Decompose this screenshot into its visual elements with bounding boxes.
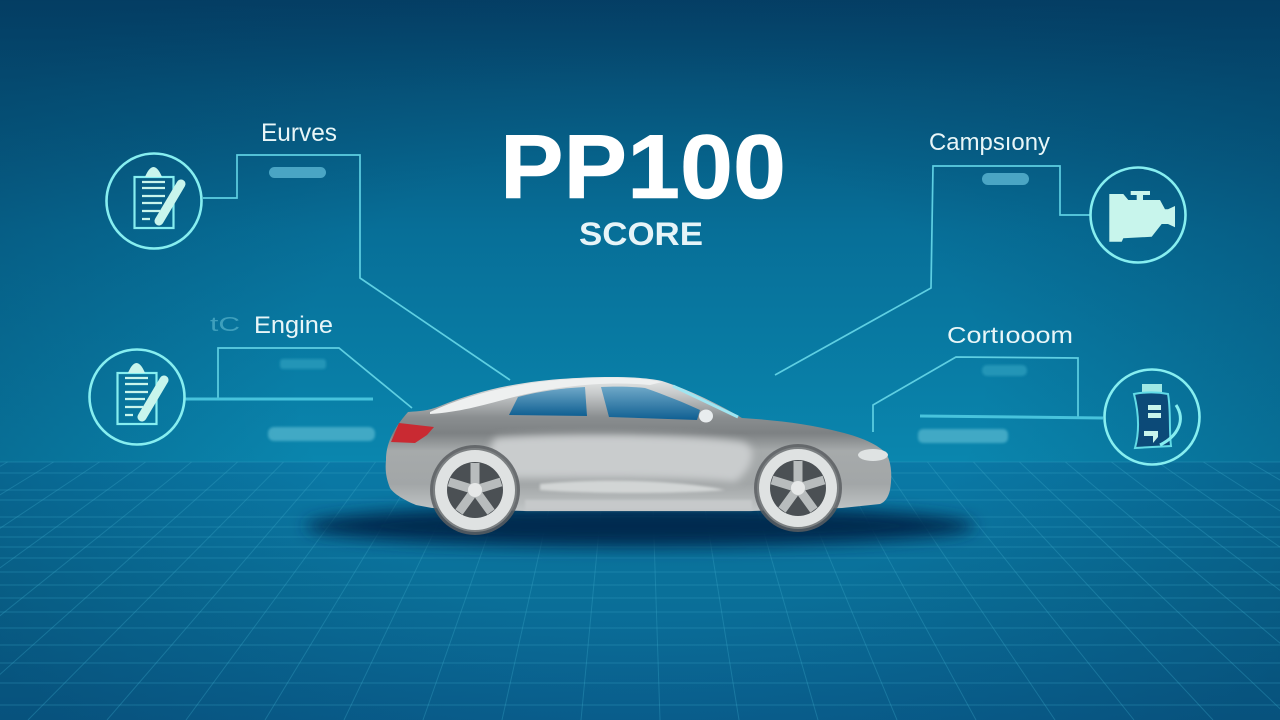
connector line: Eurves to car — [203, 155, 510, 380]
title: PP100: PP100 — [500, 117, 786, 218]
icon: engine — [1090, 168, 1186, 262]
perspective grid floor — [0, 462, 1280, 720]
front window — [601, 387, 700, 420]
lower crease — [540, 481, 725, 493]
placeholder bar — [918, 429, 1008, 443]
callout: Engine (lower left) — [90, 312, 412, 444]
car ground shadow — [305, 505, 975, 547]
callout: Campsiony (top right) — [775, 129, 1186, 375]
label: Eurves: Eurves — [261, 119, 337, 147]
headlight — [858, 449, 888, 461]
thick baseline bar — [185, 398, 373, 400]
tail light — [391, 423, 434, 443]
sill highlight — [525, 500, 752, 510]
rear window — [509, 387, 587, 416]
connector line: Campsiony to car — [775, 166, 1090, 375]
placeholder bar — [982, 173, 1029, 185]
front wheel — [754, 444, 842, 532]
faint glyph beside Engine label: tC — [210, 314, 240, 336]
placeholder bar — [280, 359, 326, 369]
connector line: Engine to car — [218, 348, 412, 408]
label: Engine: Engine — [254, 312, 333, 339]
label: Cortiooom: Cortıooom — [947, 322, 1073, 348]
placeholder bar — [982, 365, 1027, 376]
rear wheel — [430, 445, 520, 535]
thick baseline bar — [920, 416, 1103, 418]
car — [386, 377, 891, 535]
subtitle: SCORE: SCORE — [579, 216, 703, 252]
icon: clipboard and pen — [90, 350, 184, 444]
label: Campsiony: Campsıony — [929, 129, 1050, 156]
callout: Eurves (top left) — [106, 119, 510, 380]
callout: Cortiooom (lower right) — [873, 322, 1200, 464]
windshield edge — [673, 386, 738, 417]
side mirror — [699, 410, 713, 422]
placeholder bar — [269, 167, 326, 178]
icon: oil bottle — [1104, 370, 1200, 464]
icon: clipboard and pen — [106, 154, 202, 248]
connector line: Cortiooom to car — [873, 357, 1078, 432]
placeholder bar — [268, 427, 375, 441]
roof highlight — [430, 378, 662, 414]
car body — [386, 377, 891, 511]
door highlight — [490, 435, 752, 482]
